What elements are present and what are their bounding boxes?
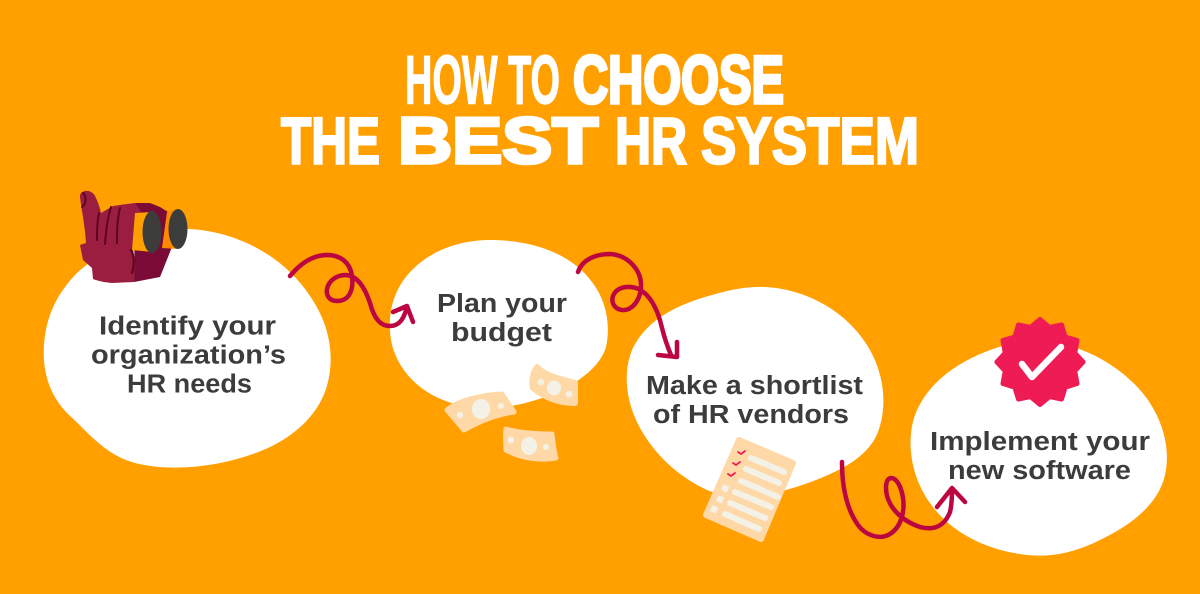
title bbox=[281, 42, 919, 178]
panel: step 3 blob bbox=[627, 287, 883, 496]
text: step 1: HR needs bbox=[127, 370, 252, 398]
icon: checklist bbox=[706, 440, 793, 539]
icon: money notes bbox=[447, 367, 575, 459]
panel: step 2 blob bbox=[390, 240, 608, 408]
arrow: step 2 to step 3 bbox=[578, 254, 677, 357]
text: step 1 bbox=[91, 312, 286, 398]
icon: check badge bbox=[997, 320, 1083, 404]
text: step 3: Make a shortlist bbox=[646, 372, 864, 400]
arrow: step 3 to step 4 bbox=[842, 462, 965, 537]
text: step 3: of HR vendors bbox=[653, 401, 849, 429]
text: step 3 bbox=[646, 372, 864, 429]
text: step 4: new software bbox=[948, 457, 1131, 485]
title: BEST bbox=[398, 104, 598, 177]
text: step 2: Plan your bbox=[437, 290, 567, 318]
panel: step 4 blob bbox=[911, 341, 1167, 556]
text: step 2: budget bbox=[451, 319, 553, 347]
title: HR bbox=[615, 104, 687, 178]
text: step 1: Identify your bbox=[99, 312, 276, 340]
text: step 1: organization’s bbox=[91, 342, 286, 370]
arrow: step 1 to step 2 bbox=[290, 255, 413, 326]
title: CHOOSE bbox=[573, 43, 784, 118]
icon: hand holding binoculars bbox=[80, 191, 188, 283]
title: THE bbox=[281, 104, 380, 178]
text: step 2 bbox=[437, 290, 567, 347]
text: step 4 bbox=[930, 428, 1150, 485]
title: HOW TO bbox=[405, 42, 560, 118]
title: SYSTEM bbox=[701, 104, 919, 178]
panel: step 1 blob bbox=[44, 229, 331, 468]
text: step 4: Implement your bbox=[930, 428, 1150, 456]
